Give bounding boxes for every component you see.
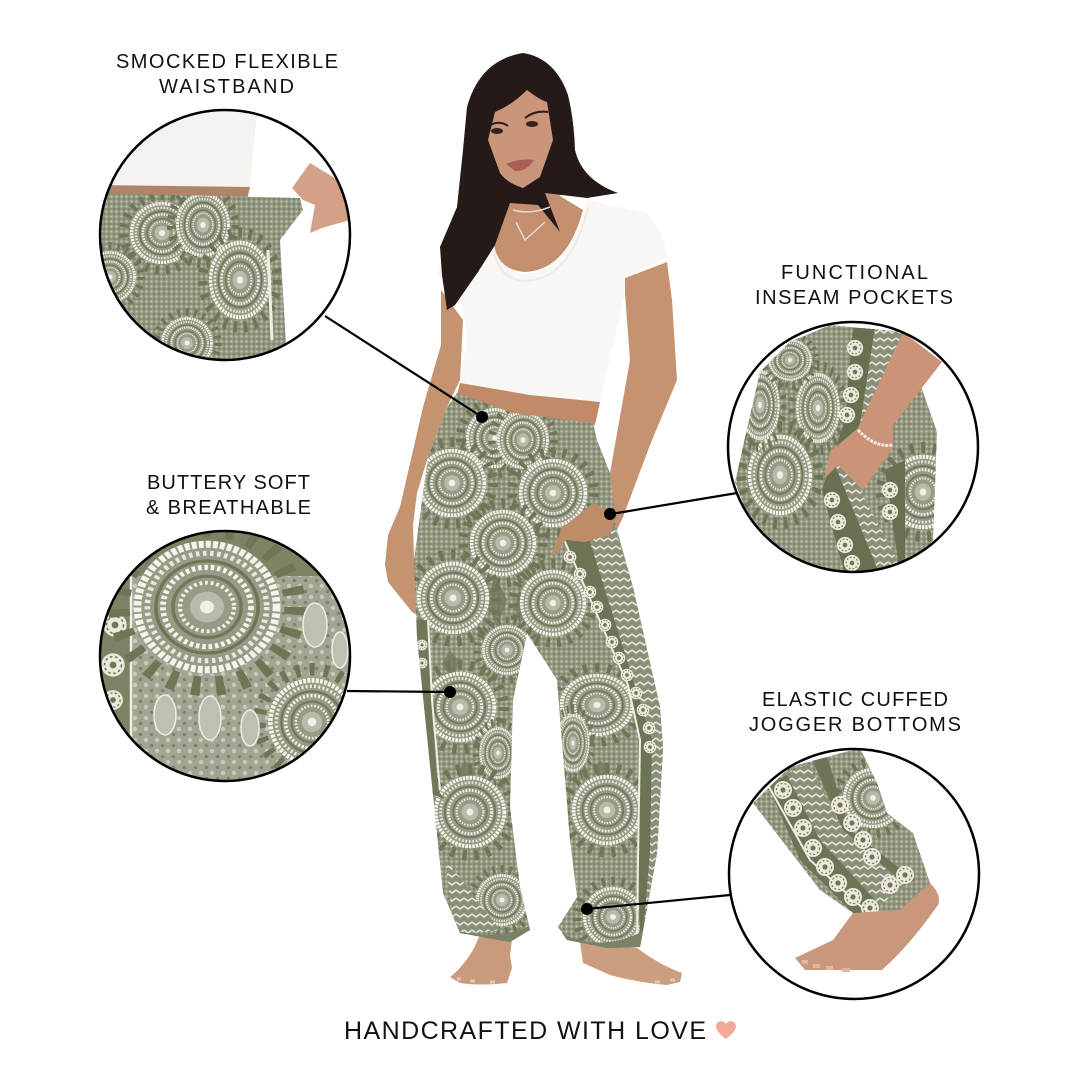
mandala print — [410, 402, 649, 953]
callout circle: pockets — [725, 320, 980, 580]
heading: elastic cuffed jogger bottoms: JOGGER BOTTOMS — [749, 714, 961, 736]
pants — [405, 385, 670, 955]
face — [488, 90, 553, 188]
heading: elastic cuffed jogger bottoms: ELASTIC CUFFED — [762, 689, 948, 711]
heading: smocked flexible waistband — [116, 51, 338, 98]
infographic: product feature callouts — [98, 53, 980, 1039]
side stripe band, left leg — [415, 620, 500, 935]
foot — [795, 883, 939, 970]
stripe — [822, 328, 880, 575]
lace petals — [154, 603, 348, 746]
side stripe band, right leg — [564, 528, 663, 947]
left arm and hand — [385, 290, 463, 618]
hair — [440, 53, 618, 310]
footer tagline: HANDCRAFTED WITH LOVE — [344, 1017, 706, 1045]
bracelet — [858, 430, 893, 445]
top neckline and shadow — [493, 208, 588, 281]
olive patches — [442, 575, 610, 787]
leader line: cuffs — [581, 895, 730, 915]
heading: functional inseam pockets — [755, 262, 953, 309]
heading: elastic cuffed jogger bottoms — [749, 689, 961, 736]
hand — [292, 163, 350, 233]
icon: heart — [716, 1021, 736, 1039]
chest and neck — [494, 165, 583, 272]
arm and hand — [825, 332, 942, 490]
facial features — [490, 112, 548, 171]
heading: buttery soft and breathable: & BREATHABLE — [146, 497, 311, 519]
heading: smocked flexible waistband: SMOCKED FLEXIBLE — [116, 51, 338, 73]
leader line: pockets — [604, 493, 737, 520]
right arm — [553, 262, 677, 556]
callout circle: cuffs — [729, 745, 981, 1001]
leader line: waistband — [325, 316, 488, 423]
heading: functional inseam pockets: INSEAM POCKETS — [755, 287, 953, 309]
toes — [802, 962, 850, 970]
leader line: fabric — [347, 686, 456, 698]
hand in pocket — [552, 503, 617, 556]
olive band — [101, 577, 130, 734]
midriff — [457, 383, 600, 425]
skin — [108, 185, 250, 197]
callout circle: fabric — [100, 528, 365, 783]
model figure — [385, 53, 682, 985]
cuff shading — [459, 926, 643, 948]
cuffed pants — [753, 750, 930, 913]
heading: functional inseam pockets: FUNCTIONAL — [781, 262, 928, 284]
necklaces — [513, 207, 550, 240]
heading: buttery soft and breathable: BUTTERY SOFT — [147, 472, 310, 494]
top — [112, 112, 256, 187]
heading: smocked flexible waistband: WAISTBAND — [159, 76, 294, 98]
feet — [450, 935, 682, 985]
heading: buttery soft and breathable — [146, 472, 311, 519]
callout circle: waistband — [98, 108, 352, 362]
white top — [437, 200, 668, 402]
